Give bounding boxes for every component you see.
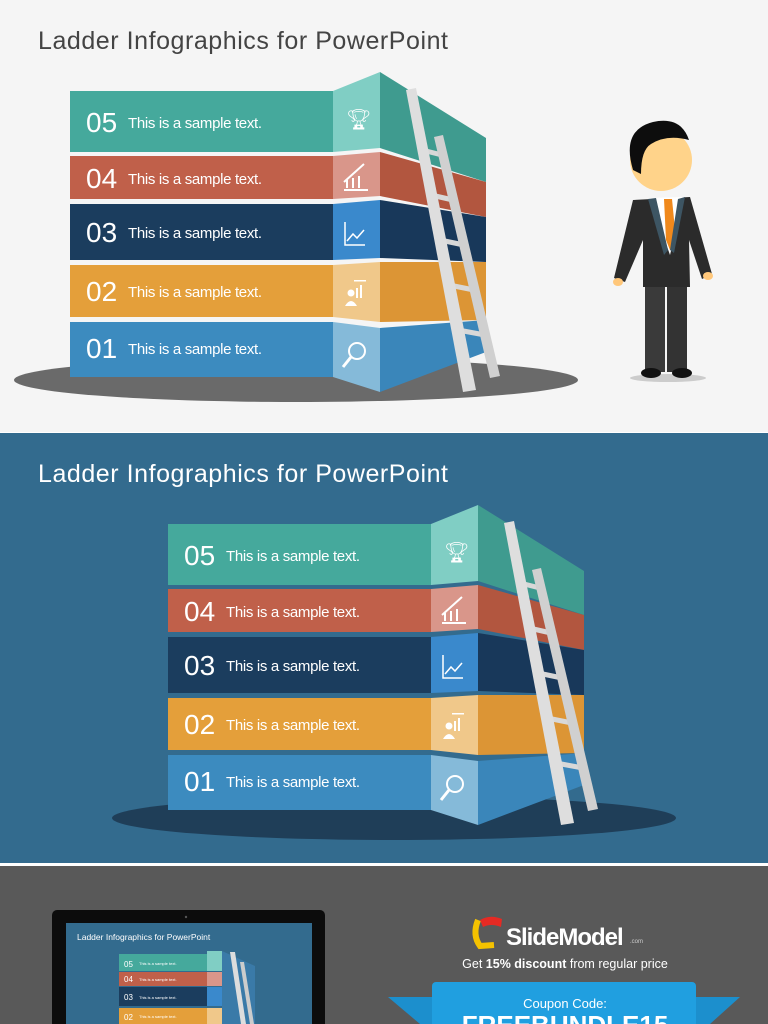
laptop mockup: 02 xyxy=(124,1013,133,1022)
laptop mockup: Ladder Infographics for PowerPoint xyxy=(77,932,211,942)
step 04: This is a sample text. xyxy=(128,171,262,188)
diagram: ladder infographic slide 2 xyxy=(112,505,676,840)
step 05: 05 xyxy=(86,107,117,138)
step 02: This is a sample text. xyxy=(128,284,262,301)
background: slide 1 xyxy=(0,0,768,432)
side faces xyxy=(380,72,486,182)
step 05: This is a sample text. xyxy=(128,115,262,132)
laptop mockup: 04 xyxy=(124,975,133,984)
step 01 xyxy=(70,322,380,392)
diagram: ladder infographic slide 2: This is a sample text. xyxy=(226,658,360,675)
diagram: ladder infographic slide 2: 03 xyxy=(184,650,215,681)
diagram: ladder infographic slide 2: 05 xyxy=(184,540,215,571)
step 03: 03 xyxy=(86,217,117,248)
laptop mockup: This is a sample text. xyxy=(139,995,177,1000)
logo: SlideModel xyxy=(475,917,643,951)
diagram: ladder infographic slide 2: This is a sample text. xyxy=(226,548,360,565)
diagram: ladder infographic slide 2: 02 xyxy=(184,709,215,740)
step 01: This is a sample text. xyxy=(128,341,262,358)
diagram: ladder infographic slide 2: 01 xyxy=(184,766,215,797)
step 04 xyxy=(70,152,380,199)
step 01: 01 xyxy=(86,333,117,364)
laptop mockup: 05 xyxy=(124,960,133,969)
laptop mockup: This is a sample text. xyxy=(139,977,177,982)
diagram: ladder infographic slide 2: 🏆︎ xyxy=(444,542,469,564)
diagram: ladder infographic slide 1 xyxy=(14,72,578,402)
person xyxy=(613,121,713,382)
diagram: ladder infographic slide 2: 04 xyxy=(184,596,215,627)
laptop mockup: This is a sample text. xyxy=(139,1014,177,1019)
step 04: 04 xyxy=(86,163,117,194)
step 05: 🏆︎ xyxy=(346,109,371,131)
title: slide 1: Ladder Infographics for PowerPoint xyxy=(38,27,448,55)
ladder xyxy=(406,88,500,392)
diagram: ladder infographic slide 2: This is a sample text. xyxy=(226,774,360,791)
background: slide 2 xyxy=(0,433,768,863)
step 05 xyxy=(70,72,380,152)
coupon ribbon xyxy=(388,982,740,1024)
title: slide 2: Ladder Infographics for PowerPoint xyxy=(38,460,448,488)
step 03 xyxy=(70,200,380,260)
diagram: ladder infographic slide 2: This is a sample text. xyxy=(226,604,360,621)
shadow xyxy=(14,358,578,402)
diagram: ladder infographic slide 2: This is a sample text. xyxy=(226,717,360,734)
logo: SlideModel: .com xyxy=(630,939,643,945)
laptop mockup xyxy=(52,910,325,1024)
step 03: This is a sample text. xyxy=(128,225,262,242)
laptop mockup: This is a sample text. xyxy=(139,961,177,966)
step 02 xyxy=(70,262,380,322)
logo: SlideModel: SlideModel xyxy=(506,924,623,951)
discount text: Get 15% discount from regular price xyxy=(462,957,668,971)
background: promo xyxy=(0,866,768,1024)
laptop mockup: 03 xyxy=(124,993,133,1002)
step 02: 02 xyxy=(86,276,117,307)
coupon ribbon: Coupon Code: xyxy=(523,996,607,1011)
